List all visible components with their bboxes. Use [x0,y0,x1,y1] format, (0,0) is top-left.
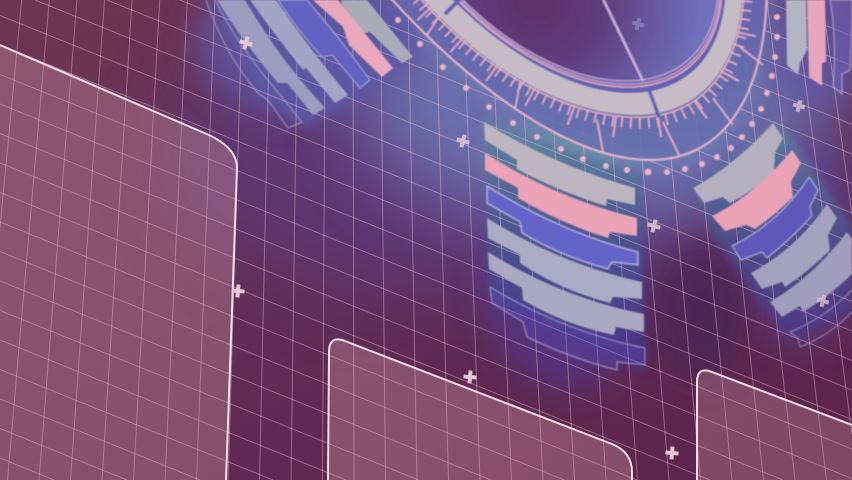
dial centre disc [426,0,722,87]
dial dot ring [395,14,780,175]
arc segment blue [277,0,370,88]
plus markers [231,17,830,460]
plus marker [792,99,806,113]
dial short ticks [394,0,747,123]
band gap at spoke [648,87,659,117]
dial inner blue gap [421,0,726,93]
blue glow behind HUD [170,0,852,390]
arc segment pink [712,150,801,231]
arc segment outline [790,290,852,347]
arc segment pale [786,0,807,75]
arc group: upper right [786,0,852,94]
arc segment outline [490,287,645,370]
arc group: right [693,123,852,347]
plus marker [665,446,679,460]
plus marker [231,284,245,298]
plus marker [816,294,830,308]
radial divider lines [427,15,763,155]
disc face [431,0,718,81]
arc segment blue [487,186,638,269]
dial tick base line [398,0,744,117]
arc segment pink [313,0,393,77]
HUD dial [365,0,780,175]
arc segment blue [732,177,818,260]
dial ring base [365,0,767,160]
arc segment pale blue lower [488,252,644,335]
arc segment pink [485,153,637,238]
dial pale band [400,0,743,115]
panel: centre card [328,339,632,480]
disc rim [429,0,720,84]
arc segment pale blue [751,204,837,289]
plus marker [463,370,477,384]
dial long ticks [390,0,751,128]
arc segment pale [341,0,413,63]
arc segment pale [693,123,783,203]
arc segment pale blue outer [217,0,325,115]
band gap upper left [445,0,463,14]
arc segment pink [807,0,826,86]
arc group: upper left [206,0,413,128]
panel: large left card [0,45,237,480]
dial spoke [603,0,643,81]
arc segment pale [484,122,635,206]
panel: right card [697,370,852,480]
plus marker [238,35,254,51]
arc segment pale blue [487,218,642,303]
plus marker [646,218,662,234]
arc segment pale blue outer [770,232,852,317]
plus marker [631,17,645,31]
arc segment pale blue [250,0,348,103]
arc segment outline [206,0,302,128]
plus marker [455,133,471,149]
arc segment blue outline [830,0,852,94]
arc group: bottom centre [484,122,645,370]
